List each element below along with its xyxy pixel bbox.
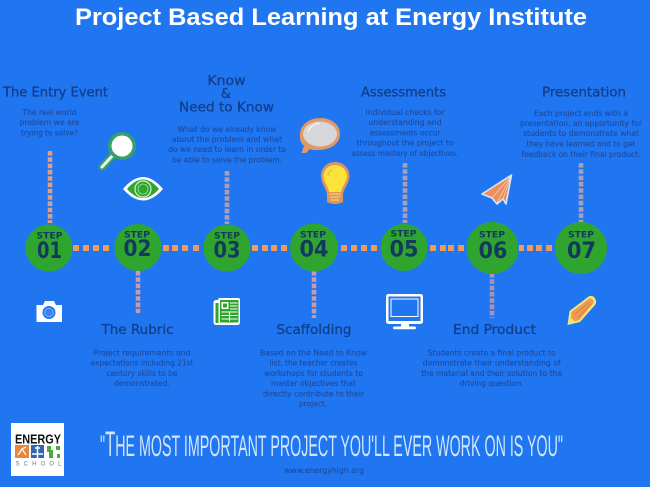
block: Know and Need to Know [168, 74, 286, 164]
block: Assessments [352, 86, 458, 158]
block: Presentation: presentation, an opportunity for [520, 119, 643, 128]
step 04 badge: 04 [300, 238, 328, 262]
block: Presentation: they have learned and to get [526, 140, 636, 148]
step 04 badge: STEP [300, 230, 326, 240]
block: Know and Need to Know: be able to solve the problem. [172, 156, 282, 164]
block: Presentation [520, 86, 643, 159]
block: End Product: driving question. [460, 379, 524, 388]
icon: camera [36, 301, 62, 322]
block: The Rubric: century skills to be [106, 369, 178, 378]
icon: paper plane [482, 175, 512, 204]
block: The Entry Event: The Entry Event [2, 86, 108, 100]
block: Presentation: students to demonstrate what [523, 129, 639, 138]
block: The Rubric: Project requirements and [94, 348, 190, 358]
step 07 badge: STEP [568, 230, 594, 240]
step 06 badge: STEP [479, 230, 505, 240]
block: Assessments: assessments occur [370, 128, 441, 138]
step 03 badge: 03 [214, 238, 240, 264]
step 01 badge: 01 [37, 239, 62, 264]
block: Assessments: Assessments [361, 86, 446, 100]
website url: www.energyhigh.org [284, 466, 364, 475]
block: The Entry Event [2, 86, 108, 138]
block: End Product: End Product [453, 323, 536, 338]
block: Know and Need to Know: & [221, 87, 231, 102]
icon: newspaper [214, 298, 240, 325]
step 01 badge [26, 224, 72, 272]
block: The Rubric [90, 323, 194, 388]
block: Know and Need to Know: Know [208, 74, 246, 89]
title: Project Based Learning at Energy Institute [75, 4, 587, 31]
block: Scaffolding: list, the teacher creates [270, 358, 358, 368]
icon: light bulb [321, 162, 350, 204]
icon: computer monitor [386, 294, 423, 329]
block: Scaffolding: Based on the Need to Know [260, 348, 368, 358]
block: End Product [421, 323, 562, 388]
logo: Energy School: SCHOOL [16, 462, 62, 468]
block: Scaffolding: master objectives that [271, 379, 356, 388]
step 05 badge: 05 [390, 238, 418, 262]
block: Know and Need to Know: about the problem and what [172, 135, 282, 144]
block: Presentation: feedback on their final product. [522, 150, 640, 159]
icon: pencil [568, 296, 596, 325]
block: The Entry Event: problem we are [20, 118, 80, 127]
block: Assessments: assess mastery of objectives. [352, 149, 458, 158]
connector: horizontal dotted timeline [73, 245, 552, 251]
block: Assessments: understanding and [368, 118, 442, 127]
block: End Product: demonstrate their understanding of [423, 358, 561, 368]
step 05 badge [380, 224, 428, 271]
block: The Rubric: demonstrated. [114, 379, 170, 388]
connectors: vertical dotted lines [50, 151, 581, 318]
step 03 badge [204, 224, 250, 272]
block: Assessments: throughout the project to [356, 138, 454, 148]
icon: magnifying glass [102, 132, 136, 167]
block: Assessments: Individual checks for [366, 108, 445, 117]
step 02 badge [114, 224, 162, 271]
block: Know and Need to Know: Need to Know [179, 100, 274, 116]
block: Scaffolding: project. [299, 400, 327, 408]
block: The Entry Event: trying to solve? [21, 128, 78, 138]
block: Know and Need to Know: What do we already know [178, 125, 277, 134]
step 01 badge: STEP [36, 232, 63, 242]
step 03 badge: STEP [214, 232, 240, 242]
block: Scaffolding: Scaffolding [276, 323, 352, 338]
block: Presentation: Presentation [542, 86, 626, 100]
block: Scaffolding: directly contribute to their [263, 390, 365, 398]
logo: Energy School [11, 423, 64, 476]
block: The Rubric: expectations including 21st [90, 358, 194, 368]
block: End Product: Students create a final product to [428, 348, 556, 358]
logo: Energy School: ENERGY [15, 432, 62, 446]
step 05 badge: STEP [390, 230, 417, 240]
block: The Rubric: The Rubric [100, 323, 174, 338]
step 07 badge [555, 222, 607, 274]
step 02 badge: 02 [124, 237, 152, 262]
block: Scaffolding [260, 323, 368, 408]
step 06 badge [466, 222, 518, 274]
block: Scaffolding: workshops for students to [264, 369, 363, 378]
block: Presentation: Each project ends with a [534, 109, 628, 118]
icon: eye [123, 177, 163, 200]
step 07 badge: 07 [567, 239, 596, 264]
step 02 badge: STEP [124, 230, 150, 240]
step 04 badge [290, 224, 338, 272]
step 06 badge: 06 [478, 239, 508, 264]
icon: speech bubble [300, 118, 340, 153]
block: Know and Need to Know: do we need to learn in order to [168, 145, 286, 154]
block: End Product: the material and their solution to the [421, 369, 562, 378]
block: The Entry Event: The real world [22, 108, 76, 117]
